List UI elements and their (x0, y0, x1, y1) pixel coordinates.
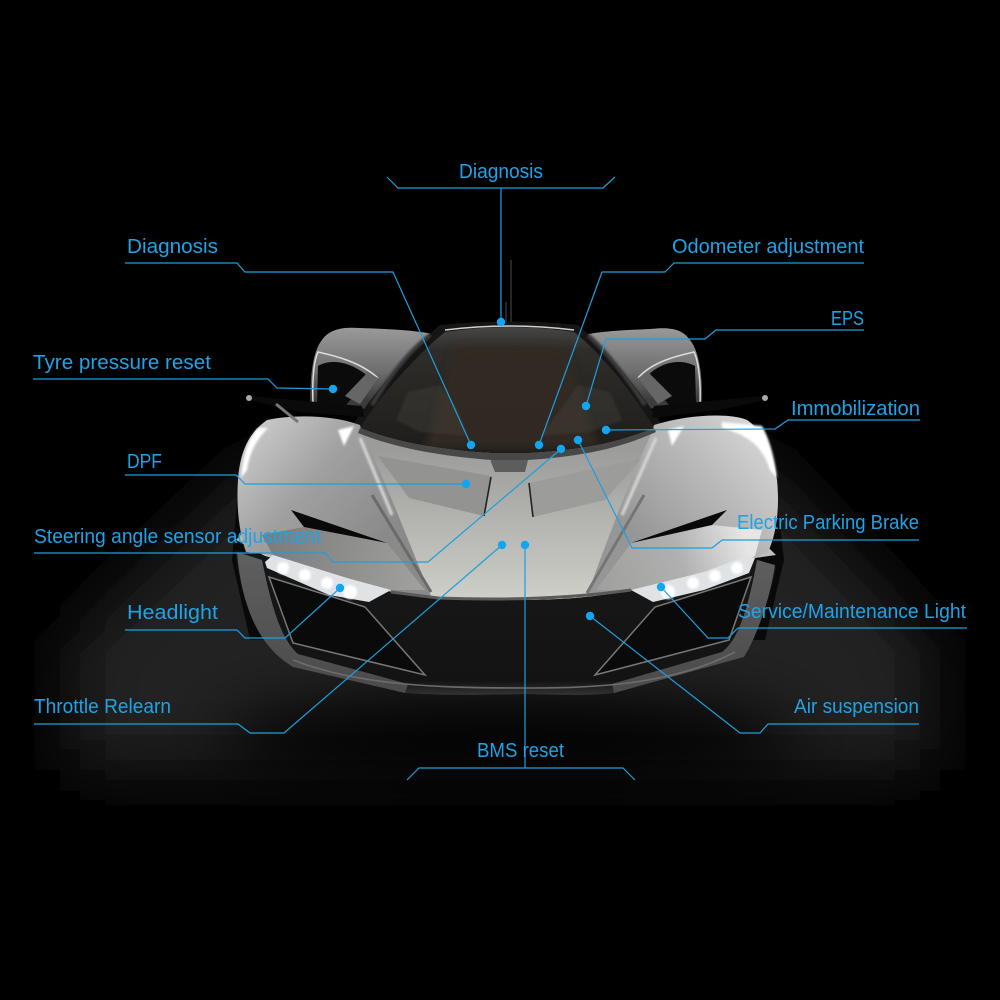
line: steering angle (34, 449, 561, 562)
line: service light (661, 587, 967, 638)
right headlight (631, 556, 755, 602)
pillar sheen (372, 335, 645, 405)
right mirror (652, 395, 768, 418)
label: top diagnosis: Diagnosis (459, 161, 543, 183)
line: left diagnosis (125, 263, 471, 445)
label: tyre pressure reset: Tyre pressure reset (33, 352, 211, 374)
right fender (587, 416, 778, 596)
windscreen (360, 327, 654, 453)
front bumper (235, 550, 776, 695)
tyres (232, 490, 784, 640)
cowl strip (358, 428, 656, 460)
line: DPF (125, 475, 466, 484)
label: throttle relearn: Throttle Relearn (34, 696, 171, 718)
bumper right skirt (612, 560, 775, 693)
bumper left skirt (237, 552, 408, 693)
line: BMS (407, 545, 635, 780)
line: tyre pressure (33, 379, 333, 389)
line: throttle (34, 545, 502, 733)
hood creases (360, 438, 656, 593)
label: DPF: DPF (127, 451, 162, 473)
hood scoop notch (491, 453, 529, 472)
left fender (237, 416, 431, 596)
left mirror (246, 395, 364, 422)
line: EPS (586, 330, 864, 406)
left hood vent (378, 456, 491, 516)
right air intake (595, 577, 751, 675)
line: parking brake (578, 440, 919, 548)
roof and pillars (348, 322, 666, 452)
left air intake (269, 577, 425, 675)
label: electric parking brake: Electric Parking Brake (737, 512, 919, 534)
label: air suspension: Air suspension (794, 696, 919, 718)
roof highlight (445, 326, 574, 330)
label: headlight: Headlight (127, 602, 218, 624)
label: steering angle sensor adjustment: Steering angle sensor adjustment (34, 526, 321, 548)
labels (33, 161, 966, 762)
line: immobilization (606, 420, 920, 430)
line: air suspension (590, 616, 919, 733)
label: service/maintenance light: Service/Maintenance Light (738, 601, 966, 623)
right hood vent (529, 458, 642, 517)
line: odometer (539, 263, 864, 445)
label: immobilization: Immobilization (791, 398, 920, 420)
lower left panel (262, 527, 425, 590)
marker dots (329, 318, 665, 620)
sports car (232, 260, 784, 695)
antennas (506, 260, 511, 348)
right black side slit (631, 510, 727, 543)
road (70, 460, 930, 782)
rear wing left (310, 328, 432, 412)
seats (396, 385, 622, 436)
label: left diagnosis: Diagnosis (127, 236, 218, 258)
left black side slit (291, 510, 387, 543)
line: top diagnosis (387, 177, 615, 322)
left headlight (265, 555, 391, 602)
rear wing right (585, 328, 702, 412)
fender highlights (241, 422, 777, 478)
body lower edge (391, 590, 631, 599)
label: EPS: EPS (831, 308, 864, 330)
leader lines (33, 177, 967, 780)
label: BMS reset: BMS reset (477, 740, 564, 762)
label: odometer adjustment: Odometer adjustment (672, 236, 864, 258)
lower right panel (596, 525, 762, 590)
hood and central body (236, 428, 776, 600)
line: headlight (125, 588, 340, 638)
